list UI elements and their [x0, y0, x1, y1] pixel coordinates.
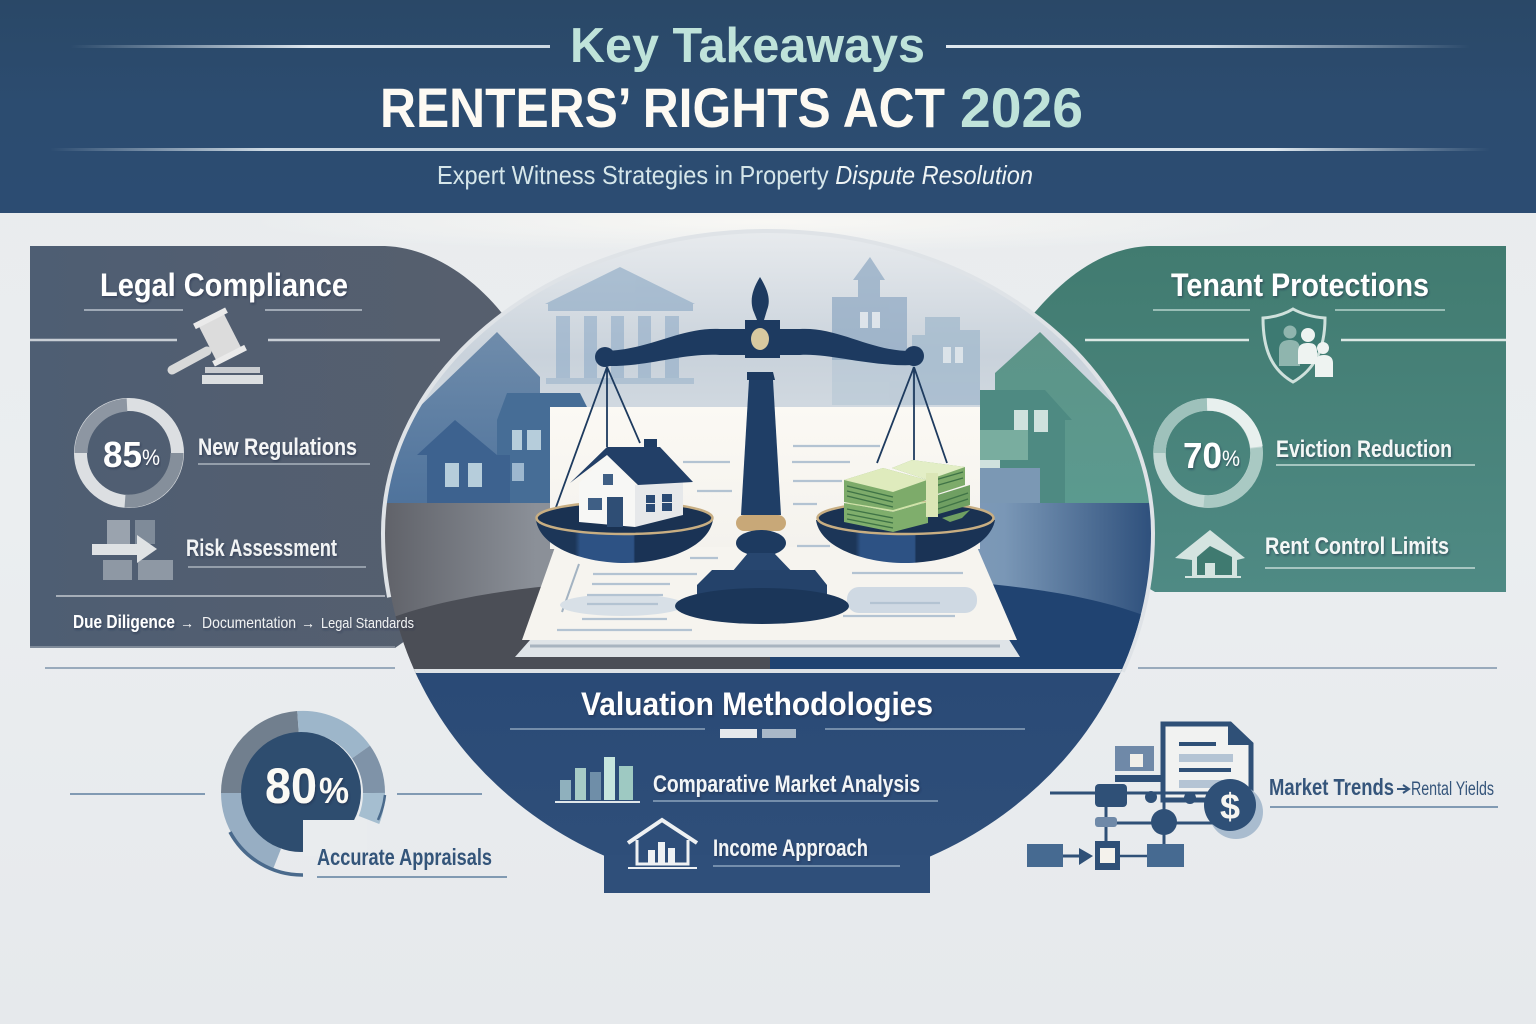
flow: due diligence to legal standards: Legal Standards: [321, 615, 414, 632]
heading: tenant protections: Tenant Protections: [1171, 267, 1429, 303]
left pan: [536, 502, 713, 563]
background: towers: [832, 257, 980, 405]
right pan: [816, 502, 995, 563]
donut: 80 percent: %: [319, 770, 349, 811]
background: courthouse: [545, 267, 695, 384]
icon: house chart: [628, 820, 697, 868]
label: market trends to rental yields: Market Trends: [1269, 774, 1394, 800]
icon: document flow with dollar: [1027, 724, 1263, 870]
header banner: [0, 0, 1536, 213]
label: market trends to rental yields: Rental Yields: [1411, 779, 1494, 800]
flow: due diligence to legal standards: Documentation: [202, 615, 296, 632]
flow: due diligence to legal standards: [73, 612, 414, 632]
donut: 80 percent: [230, 722, 385, 875]
flow: due diligence to legal standards: →: [180, 615, 194, 631]
label: income approach: Income Approach: [713, 835, 868, 862]
label: comparative market analysis: Comparative Market Analysis: [653, 771, 920, 798]
label: risk assessment: Risk Assessment: [186, 535, 337, 562]
title: renters rights act: RENTERS’ RIGHTS ACT: [380, 76, 945, 139]
central circle illustration: [380, 230, 1160, 892]
label: new regulations: New Regulations: [198, 434, 357, 461]
donut: 85 percent: %: [142, 445, 160, 470]
icon: shield family: [1263, 309, 1333, 382]
flow: due diligence to legal standards: Due Diligence: [73, 612, 175, 632]
label: accurate appraisals: Accurate Appraisals: [317, 844, 492, 870]
donut: 85 percent: [80, 404, 178, 502]
panel: valuation methodologies: [510, 686, 1025, 893]
background: houses left: [385, 332, 587, 503]
background: houses right: [980, 332, 1150, 503]
label: market trends to rental yields: [1269, 774, 1498, 807]
heading: valuation methodologies: Valuation Methodologies: [581, 686, 933, 722]
document: [515, 407, 1020, 657]
donut: 70 percent: [1160, 404, 1257, 502]
donut: 80 percent: 80: [265, 758, 317, 814]
label: eviction reduction: Eviction Reduction: [1276, 436, 1452, 463]
icon: risk arrow: [92, 520, 173, 580]
icon: bar chart: [555, 757, 640, 802]
heading: legal compliance: Legal Compliance: [100, 267, 348, 303]
icon: document flow with dollar: $: [1220, 786, 1240, 827]
icon: house on scale: [570, 439, 693, 527]
panel: market trends: [1027, 724, 1498, 870]
title: year 2026: 2026: [960, 76, 1083, 139]
icon: money stacks: [844, 460, 970, 532]
donut: 85 percent: 85: [103, 434, 142, 475]
subtitle: Expert Witness Strategies in Property Dispute Resolution: [437, 160, 1033, 190]
valuation band inside circle: [415, 672, 1121, 856]
label: rent control limits: Rent Control Limits: [1265, 533, 1449, 560]
scale: [555, 277, 947, 624]
panel: tenant protections: [1000, 246, 1506, 592]
donut: 70 percent: 70: [1183, 435, 1222, 476]
icon: house: [1175, 530, 1245, 577]
icon: gavel: [172, 307, 263, 384]
flow: due diligence to legal standards: →: [301, 615, 315, 631]
panel: accurate appraisals: [70, 722, 507, 877]
title: key takeaways: Key Takeaways: [570, 19, 925, 73]
donut: 70 percent: %: [1222, 446, 1240, 471]
panel: legal compliance: [30, 246, 520, 648]
ground: [385, 503, 554, 683]
